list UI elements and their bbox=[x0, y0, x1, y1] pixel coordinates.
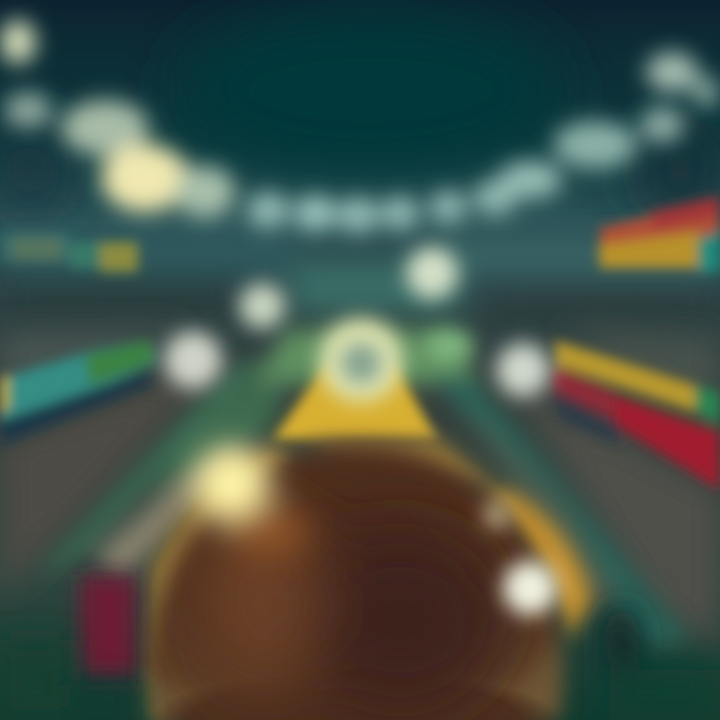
pitch bbox=[40, 330, 690, 650]
stands lower left and right bbox=[0, 330, 720, 650]
right crowd banner bbox=[552, 340, 720, 490]
centre ball bbox=[319, 318, 403, 402]
upper left banner bbox=[0, 232, 138, 272]
sky dome bbox=[0, 10, 720, 220]
floodlight balls bbox=[164, 247, 550, 397]
lens flare on head bbox=[194, 447, 310, 556]
left crowd banner bbox=[0, 340, 158, 445]
upper right flag bbox=[598, 196, 720, 272]
foreground dark players bbox=[0, 605, 720, 720]
stand bands bbox=[0, 232, 720, 325]
white light lower right bbox=[483, 501, 557, 615]
foreground head bbox=[148, 445, 563, 720]
stadium lights arc bbox=[0, 20, 720, 233]
head base fill bbox=[150, 620, 560, 720]
red banner lower left bbox=[80, 575, 136, 680]
yellow wedge bbox=[272, 365, 438, 440]
yellow glow around head bbox=[150, 440, 592, 720]
head inner shading bbox=[200, 510, 500, 710]
